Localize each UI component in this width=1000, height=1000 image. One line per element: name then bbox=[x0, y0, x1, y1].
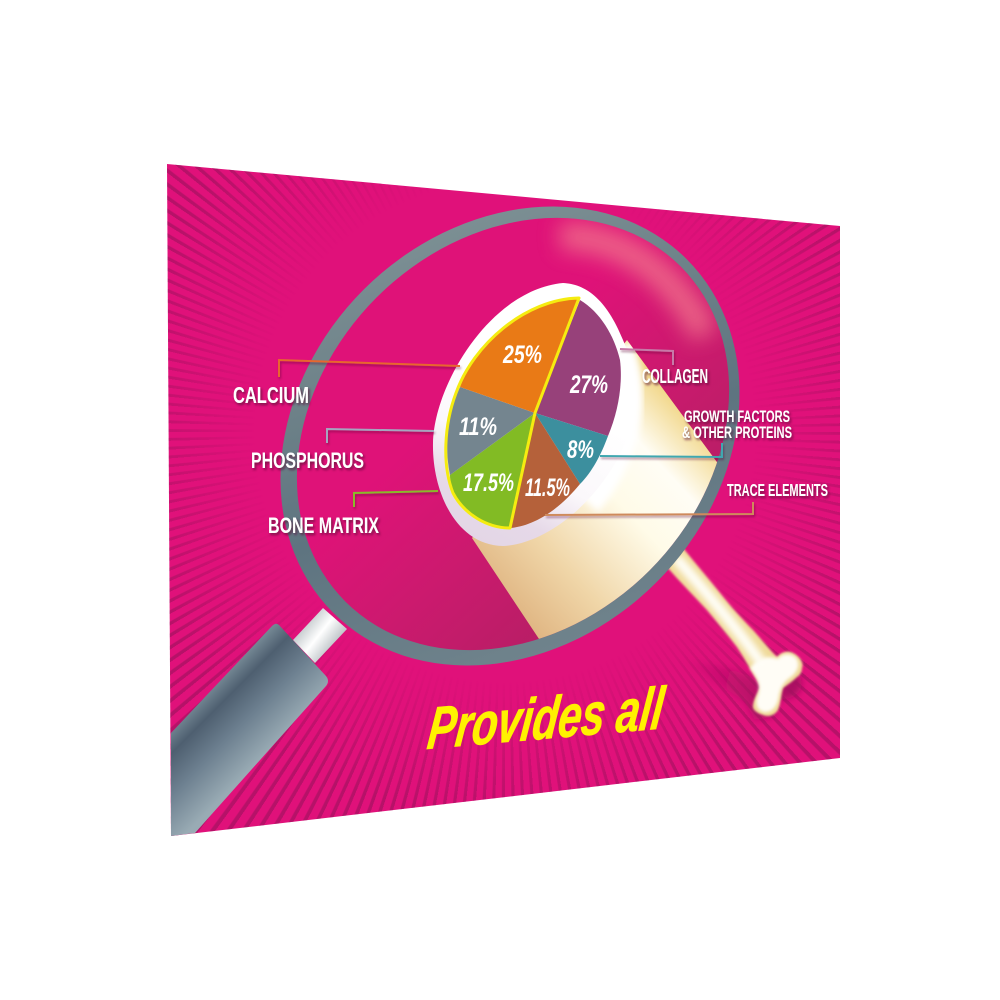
label: phosphorus: PHOSPHORUS bbox=[251, 448, 364, 473]
magnifier lens ring bbox=[187, 113, 833, 759]
handle ferrule bbox=[293, 608, 347, 663]
pie yellow outline bbox=[446, 298, 579, 528]
label: growth factors and other proteins bbox=[682, 408, 792, 442]
panel: magenta perspective background with rays bbox=[167, 164, 840, 836]
icon: bone bbox=[667, 548, 803, 716]
value: 8%: 8% bbox=[567, 436, 594, 464]
handle grip bbox=[171, 624, 328, 836]
icon: magnifier handle bbox=[171, 608, 347, 836]
infographic artwork bbox=[171, 206, 830, 836]
label: trace elements: TRACE ELEMENTS bbox=[727, 480, 828, 500]
slice: collagen 27% bbox=[535, 300, 621, 436]
pie rim bbox=[433, 283, 634, 546]
leader: trace elements bbox=[545, 502, 753, 515]
label: collagen: COLLAGEN bbox=[642, 366, 708, 388]
label: growth factors and other proteins: GROWTH FACTORS bbox=[684, 408, 790, 426]
value: 25%: 25% bbox=[502, 341, 542, 369]
slice: trace elements 11.5% bbox=[511, 413, 580, 528]
bone cross-section beam inside lens bbox=[472, 340, 717, 639]
label: bone matrix: BONE MATRIX bbox=[268, 513, 379, 538]
value: 17.5%: 17.5% bbox=[463, 469, 514, 497]
slice: phosphorus 11% bbox=[447, 387, 535, 475]
bone highlight bbox=[676, 558, 762, 664]
value: 11%: 11% bbox=[459, 413, 497, 441]
title: Provides all: Provides all bbox=[424, 674, 669, 762]
icon: bone shadow bbox=[685, 660, 802, 720]
label: growth factors and other proteins: & OTHER PROTEINS bbox=[682, 424, 792, 442]
lens glass highlight bbox=[560, 236, 705, 335]
value: 27%: 27% bbox=[569, 371, 608, 399]
pie chart with white rim bbox=[433, 283, 634, 546]
slice: calcium 25% bbox=[460, 298, 580, 413]
label: calcium: CALCIUM bbox=[233, 382, 309, 408]
value: 11.5%: 11.5% bbox=[525, 474, 570, 502]
bone head bbox=[750, 654, 798, 712]
slice: growth factors 8% bbox=[535, 413, 608, 484]
leader: growth factors bbox=[600, 443, 722, 457]
leader: bone matrix bbox=[354, 491, 438, 507]
leader: phosphorus bbox=[327, 429, 434, 443]
slice: bone matrix 17.5% bbox=[450, 413, 535, 528]
leader lines bbox=[279, 349, 753, 515]
leader: collagen bbox=[620, 349, 673, 365]
leader: calcium bbox=[279, 360, 460, 377]
magnifier lens glass bbox=[209, 130, 817, 738]
